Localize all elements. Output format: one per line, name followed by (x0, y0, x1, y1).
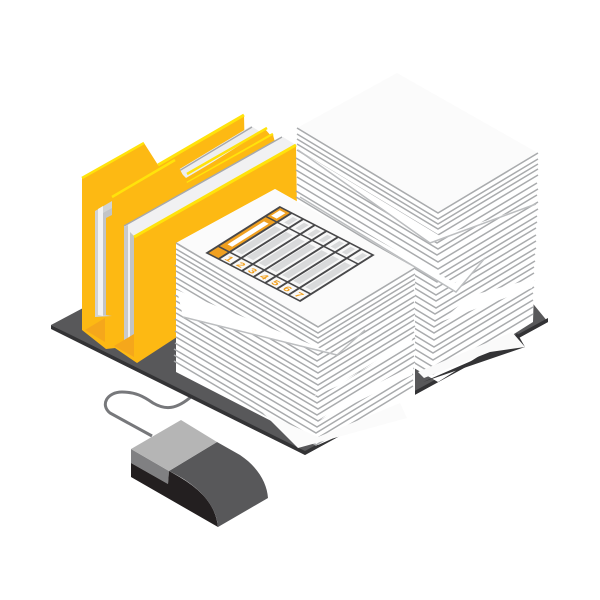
row numbers: 1 (221, 255, 236, 264)
row numbers (221, 255, 306, 300)
folder: back (82, 115, 273, 349)
folder: front (112, 135, 297, 363)
slipped sheets (177, 290, 414, 420)
left paper stack (174, 189, 415, 445)
mouse (131, 420, 268, 527)
header cells (207, 207, 292, 259)
table on top sheet (207, 207, 373, 301)
loose sheet under right stack (418, 332, 525, 382)
row numbers: 5 (268, 279, 283, 288)
mouse cable (105, 392, 192, 436)
row numbers: 4 (256, 273, 271, 282)
row numbers: 2 (233, 261, 248, 270)
right paper stack (292, 73, 538, 382)
cell bars (236, 216, 367, 290)
loose sheet under left stack (262, 403, 407, 448)
papers in front folder (124, 137, 296, 340)
row numbers: 7 (291, 291, 306, 300)
papers in back folder (95, 126, 262, 317)
row numbers: 3 (245, 267, 260, 276)
row numbers: 6 (280, 285, 295, 294)
desk mat (51, 299, 548, 455)
slipped sheets (298, 150, 536, 322)
